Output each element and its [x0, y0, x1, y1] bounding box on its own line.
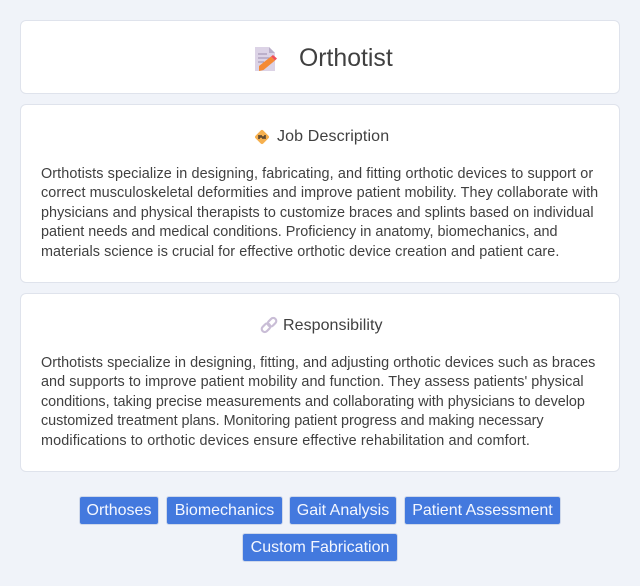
heading: responsibility: Responsibility [283, 317, 383, 334]
icon: document with pencil [255, 47, 277, 71]
tag: Orthoses: Orthoses [87, 502, 151, 519]
heading: job description: Job Description [277, 128, 389, 145]
icon: chain link [260, 316, 278, 334]
title text: Orthotist [299, 45, 393, 72]
job description text: Orthotists specialize in designing, fabricating, and fitting orthotic devices to support or [41, 166, 593, 182]
panel: title [20, 20, 620, 94]
responsibility text: modifications to orthotic devices ensure effective rehabilitation and comfort. [41, 433, 530, 449]
tag: Orthoses [79, 496, 159, 525]
responsibility text [41, 355, 595, 449]
tag: Patient Assessment [404, 496, 561, 525]
tag: Custom Fabrication: Custom Fabrication [251, 539, 389, 556]
tag: Custom Fabrication [242, 533, 398, 562]
job description text: physicians and physical therapists to customize braces and splints based on individual [41, 205, 594, 221]
panel: job description [20, 104, 620, 283]
tag: Gait Analysis [289, 496, 397, 525]
tag: Biomechanics: Biomechanics [175, 502, 274, 519]
responsibility text: and supports to improve patient mobility and function. They assess patients' physical [41, 374, 584, 390]
tag: Biomechanics [166, 496, 283, 525]
job description text: correct musculoskeletal deformities and improve patient mobility. They collaborate with [41, 185, 598, 201]
responsibility text: customized treatment plans. Monitoring patient progress and making necessary [41, 413, 544, 429]
responsibility text: conditions, taking precise measurements and collaborating with physicians to develop [41, 394, 585, 410]
job description text: materials science is crucial for effective orthotic device creation and patient care. [41, 244, 559, 260]
responsibility text: Orthotists specialize in designing, fitting, and adjusting orthotic devices such as braces [41, 355, 595, 371]
panel: responsibility [20, 293, 620, 472]
job description text [41, 166, 598, 260]
tag: Gait Analysis: Gait Analysis [297, 502, 389, 519]
tag: Patient Assessment: Patient Assessment [412, 502, 553, 519]
job description text: patient needs and medical conditions. Proficiency in anatomy, biomechanics, and [41, 224, 558, 240]
icon: diamond sign [255, 130, 269, 144]
